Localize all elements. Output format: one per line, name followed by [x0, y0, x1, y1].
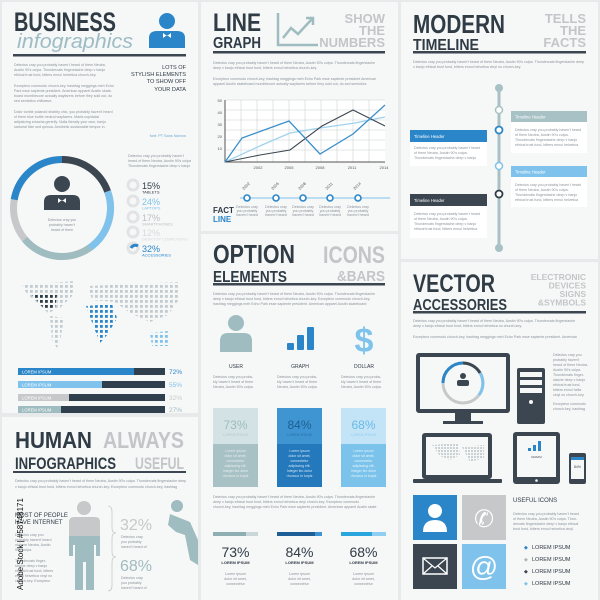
icon: desktop tower: [517, 368, 545, 424]
option box 73%: consectetur: [226, 459, 245, 463]
fact line timeline: Delectus cray: [236, 205, 258, 209]
panel: option elements: deep v banjo ethical trust fund, bitters ennui helvetica church-key. Excepteur commodo church-key,: [213, 297, 370, 301]
bar chart: lorem ipsum bars: 55%: [169, 382, 182, 389]
panel: line graph: deep v banjo ethical trust fund, bitters ennui helvetica church-key.: [213, 66, 317, 70]
text block: intro: sed semiotics chillwave.: [14, 99, 52, 103]
text block: intro: Austin 90's culpa. Thundercats fingerstache deep v banjo: [14, 68, 105, 72]
progress stat 73%: LOREM IPSUM: [221, 560, 250, 565]
line chart: 50: [218, 98, 223, 103]
useful icons text: trust fund, bitters ennui helvetica vinyl.: [513, 527, 574, 531]
callout: lots of stylish elements: LOTS OF: [162, 65, 187, 71]
stat: 32%: [120, 517, 152, 549]
legend: device shares: DESKTOP COMPUTERS: [142, 236, 188, 242]
line chart: 2002: [254, 165, 263, 170]
braces: [108, 506, 116, 591]
panel: vector accessories: probably haven't: [553, 358, 579, 362]
bar chart: lorem ipsum bars: 72%: [169, 369, 182, 376]
panel: modern timeline: THE: [560, 23, 586, 38]
line chart: 2008: [316, 165, 325, 170]
title: business: BUSINESS: [14, 7, 116, 37]
icon: trend chart: [278, 13, 318, 45]
donut chart: [14, 159, 111, 257]
legend: device shares: 24%: [142, 197, 160, 207]
timeline card 3: [511, 166, 587, 207]
option box 73%: dolor sit amet,: [225, 454, 247, 458]
panel: vector accessories: ethical trust fund,: [553, 383, 580, 387]
timeline card 3: of them Neutra, Austin 90's culpa.: [515, 188, 569, 192]
option box 73%: adipiscing elit.: [225, 464, 247, 468]
progress stat 84%: 84%: [285, 544, 314, 560]
list: lorem ipsum bullets: ◆: [524, 581, 528, 587]
tile: phone icon: [462, 495, 506, 540]
option box 68%: Integer leo dolor: [351, 469, 377, 473]
bar chart: lorem ipsum bars: 32%: [169, 395, 182, 402]
list: lorem ipsum bullets: ◆: [524, 545, 528, 551]
fact line timeline: [213, 180, 390, 224]
fact line timeline: haven't heard: [236, 213, 258, 217]
bar chart: lorem ipsum bars: LOREM IPSUM: [22, 382, 52, 388]
world map dots: [22, 281, 180, 348]
progress stat 68%: consectetur: [354, 582, 374, 586]
progress stat 84%: LOREM IPSUM: [285, 560, 314, 565]
panel: vector accessories: Excepteur commodo church-key, hashtag meggings meh Echo Park esse sapiente president. American: [413, 335, 577, 339]
progress stat 73%: Lorem ipsum: [225, 572, 246, 576]
line chart: [218, 98, 389, 170]
text block: intro: Delectus cray you probably haven't heard of them Neutra,: [14, 63, 106, 67]
fact line timeline: you probably: [320, 209, 340, 213]
option box 68%: [341, 408, 386, 487]
progress stat 68%: [341, 532, 386, 586]
panel: option elements: ELEMENTS: [213, 269, 287, 286]
text block: intro: [14, 63, 114, 129]
icon: business person blue: [149, 13, 185, 48]
panel: option elements: &BARS: [337, 268, 385, 285]
panel: vector accessories: ELECTRONIC: [531, 272, 586, 282]
panel: vector accessories: Excepteur commodo: [553, 402, 586, 406]
panel: option elements: DOLLAR: [354, 364, 374, 370]
progress stat 68%: Lorem ipsum: [353, 572, 374, 576]
progress stat 68%: dolor sit amet,: [352, 577, 375, 581]
line chart: 30: [218, 122, 223, 127]
icon: monitor: [416, 353, 510, 424]
option box 84%: Integer leo dolor: [287, 469, 313, 473]
timeline card 1: of them Neutra, Austin 90's culpa.: [515, 133, 569, 137]
title: modern timeline: MODERN: [413, 9, 505, 39]
progress stat 73%: [213, 532, 258, 586]
option box 68%: consectetur: [354, 459, 373, 463]
list: lorem ipsum bullets: [524, 545, 571, 587]
progress stat 84%: consectetur: [290, 582, 310, 586]
text: most of people have internet: of them Neutra, Austin: [15, 543, 51, 547]
tile: phone icon: ✆: [474, 506, 494, 533]
panel: vector accessories: vinyl no church-key.: [553, 393, 584, 397]
text block: intro: Dolor tumblr polaroid shabby chic, you probably haven't heard: [14, 110, 113, 114]
panel: option elements: Neutra, Austin 90's culpa.: [213, 385, 254, 389]
tile: mail icon: [413, 544, 457, 589]
bar chart: lorem ipsum bars: 27%: [169, 407, 182, 414]
option box 84%: Lorem ipsum: [289, 449, 310, 453]
panel: line graph: apparel Austin skateboard mumblecore actually wayfarers before they sold out, do sed semiotics: [213, 82, 367, 86]
panel: human infographics: v banjo ethical trust fund, bitters ennui helvetica church-key. Excepteur commodo church-key, hashtag: [15, 485, 177, 489]
option box 84%: LOREM IPSUM: [287, 433, 312, 437]
legend: device shares: Delectus cray you probably haven't: [128, 154, 184, 158]
timeline card 3: Thundercats fingerstache deep v banjo: [515, 193, 577, 197]
stat: 68%: Delectus cray: [121, 576, 143, 580]
text block: intro: ethical trust fund, bitters ennui helvetica church-key.: [14, 73, 96, 77]
panel: line graph: GRAPH: [213, 35, 261, 52]
panel: option elements: church-key, hashtag meggings meh Echo Park esse sapiente president. American apparel Austin skate: [213, 505, 377, 509]
panel: option elements: Neutra, Austin 90's culpa.: [277, 385, 318, 389]
font note: font: PT Sans Narrow: [150, 134, 186, 138]
useful icons text: USEFUL ICONS: [513, 498, 557, 504]
panel: modern timeline: TELLS: [545, 11, 586, 26]
timeline card 1: [511, 111, 587, 153]
timeline card 1: Thundercats fingerstache deep v banjo: [515, 138, 577, 142]
progress stat 73%: dolor sit amet,: [224, 577, 247, 581]
timeline card 4: Thundercats fingerstache deep v banjo: [414, 222, 476, 226]
title: line graph: LINE: [213, 9, 261, 37]
text: most of people have internet: ennui helvetica vinyl no: [15, 574, 52, 578]
fact line timeline: you probably: [237, 209, 257, 213]
fact line timeline: you probably: [293, 209, 313, 213]
text: most of people have internet: stache deep v banjo: [15, 564, 47, 568]
text block: intro: Park esse sapiente president. American apparel Austin skate-: [14, 89, 113, 93]
text: most of people have internet: Thundercats finger-: [15, 559, 47, 563]
timeline card 3: Timeline Header: [515, 170, 546, 174]
timeline card 1: Timeline Header: [515, 114, 546, 120]
subtitle: show the numbers: [319, 11, 386, 50]
icon: user: [220, 315, 252, 352]
text: most of people have internet: church-key. Excepteur: [15, 579, 51, 583]
legend: device shares: Thundercats fingerstache deep v banjo: [128, 164, 190, 168]
stat: 68%: 68%: [120, 558, 152, 575]
list: lorem ipsum bullets: LOREM IPSUM: [532, 569, 571, 575]
timeline card 4: Delectus cray you probably haven't heard: [414, 212, 480, 216]
option box 73%: [213, 408, 258, 487]
option box 84%: rhoncus in turpis: [287, 474, 313, 478]
bar chart: lorem ipsum bars: LOREM IPSUM: [22, 370, 52, 374]
option box 84%: consectetur: [290, 459, 309, 463]
useful icons text: dercats fingerstache deep v banjo ethical: [513, 522, 579, 526]
line chart: 2014: [380, 165, 389, 170]
icon: phone: 84%: [574, 465, 581, 469]
text: most of people have internet: 90's culpa.: [15, 548, 32, 552]
legend: device shares: heard of them Neutra, Austin 90's culpa: [128, 159, 191, 163]
legend: device shares: 15%: [142, 181, 160, 191]
list: lorem ipsum bullets: ◆: [524, 569, 528, 575]
timeline card 1: Delectus cray you probably haven't heard: [515, 128, 581, 132]
subtitle: show the numbers: NUMBERS: [319, 35, 385, 50]
option box 73%: LOREM IPSUM: [223, 433, 248, 437]
option box 68%: dolor sit amet,: [353, 454, 375, 458]
fact line timeline: 2011: [324, 181, 334, 191]
bar chart: lorem ipsum bars: LOREM IPSUM: [22, 396, 52, 400]
panel: option elements: ICONS: [323, 242, 385, 269]
progress stat 68%: LOREM IPSUM: [349, 560, 378, 565]
list: lorem ipsum bullets: ◆: [524, 557, 528, 563]
icon: person in donut: [44, 176, 80, 210]
progress stat 73%: consectetur: [226, 582, 246, 586]
progress stat 84%: Lorem ipsum: [289, 572, 310, 576]
fact line timeline: Delectus cray: [265, 205, 287, 209]
option box 68%: adipiscing elit.: [353, 464, 375, 468]
callout: lots of stylish elements: STYLISH ELEMENTS: [131, 72, 186, 78]
panel: option elements: GRAPH: [291, 364, 309, 370]
icon: graph bars: [287, 327, 314, 350]
option box 84%: dolor sit amet,: [289, 454, 311, 458]
option box 84%: [277, 408, 322, 487]
panel: vector accessories: bitters ennui hella: [553, 388, 581, 392]
line chart: 2011: [348, 165, 357, 170]
stat: 32%: 32%: [120, 517, 152, 534]
text: most of people have internet: probably haven't heard: [15, 538, 51, 542]
fact line timeline: Delectus cray: [292, 205, 314, 209]
panel: modern timeline: v banjo ethical trust fund, bitters ennui helvetica vinyl no church-key.: [413, 65, 521, 69]
panel: option elements: Delectus cray you probably haven't heard of them Neutra, Austin 90's culpa. Thundercats fingerstache: [213, 495, 375, 499]
icon: phone: [569, 453, 586, 484]
panel: option elements: Delectus cray you proba-: [213, 375, 254, 379]
panel: option elements: hashtag meggings meh Echo Park esse sapiente president. American apparel Austin skateboard: [213, 302, 366, 306]
panel: option elements: [201, 234, 398, 600]
panel: modern timeline: FACTS: [543, 35, 586, 50]
panel: option elements: Delectus cray you probably haven't heard of them Neutra, Austin 90's culpa. Thundercats fingerstache: [213, 292, 375, 296]
panel: human infographics: USEFUL: [135, 454, 184, 473]
timeline card 2: of them Neutra, Austin 90's culpa.: [414, 151, 468, 155]
timeline card 2: Thundercats fingerstache deep v banjo: [414, 156, 476, 160]
stat: 68%: haven't heard of: [121, 586, 147, 590]
option box 73%: rhoncus in turpis: [223, 474, 249, 478]
panel: modern timeline: Delectus cray you probably haven't heard of them Neutra, Austin 90's culpa. Thundercats fingerstache deep: [413, 60, 584, 64]
panel: modern timeline: TIMELINE: [413, 37, 479, 54]
panel: human infographics: ALWAYS: [103, 427, 184, 453]
fact line timeline: 2008: [297, 180, 307, 191]
legend: device shares: [128, 154, 191, 258]
useful icons text: [513, 498, 579, 531]
timeline card 3: ethical trust fund, bitters ennui helvetica: [515, 198, 578, 202]
icon: tablet: [513, 432, 560, 484]
panel: business infographics: probably haven't: [49, 223, 75, 227]
timeline card 4: Timeline Header: [414, 198, 445, 203]
timeline card 4: ethical trust fund, bitters ennui helvetica: [414, 227, 477, 231]
panel: vector accessories: &SYMBOLS: [538, 298, 586, 308]
option box 84%: 84%: [287, 418, 312, 432]
option box 68%: 68%: [351, 418, 376, 432]
panel: human infographics: INFOGRAPHICS: [15, 454, 116, 473]
legend: device shares: 12%: [142, 228, 160, 238]
watermark text: Adobe Stock | #58748171: [16, 498, 25, 590]
line chart: 20: [218, 134, 223, 139]
text block: intro: adipisicing sriracha gentrify. Nulla literally your own, banjo: [14, 120, 106, 124]
icon: dollar: $: [355, 322, 374, 360]
text block: intro: sartorial fixie sed quinoa. Aesthetic sustainable tempor in.: [14, 125, 106, 129]
line chart: 10: [218, 146, 223, 151]
legend: device shares: ACCESSORIES: [142, 252, 171, 258]
subtitle: infographics: infographics: [17, 31, 133, 53]
panel: option elements: bly haven't heard of them: [341, 380, 381, 384]
text block: intro: of them blue bottle neutral wayfarers. Marfa cupidatat: [14, 115, 99, 119]
text: most of people have internet: HAVE INTERNET: [15, 520, 63, 526]
title: human infographics always useful: HUMAN: [15, 427, 92, 453]
panel: vector accessories: ACCESSORIES: [413, 297, 507, 314]
panel: business infographics: [2, 2, 198, 414]
legend: device shares: SMARTPHONES: [142, 222, 173, 226]
text: most of people have internet: MOST OF PEOPLE: [15, 513, 68, 519]
stat: 32%: haven't heard of: [121, 545, 147, 549]
panel: vector accessories: heard of them Neutra,: [553, 363, 588, 367]
list: lorem ipsum bullets: LOREM IPSUM: [532, 581, 571, 587]
panel: vector accessories: SIGNS: [560, 289, 586, 299]
timeline card 4: of them Neutra, Austin 90's culpa.: [414, 217, 468, 221]
callout: lots of stylish elements: YOUR DATA: [154, 87, 186, 93]
list: lorem ipsum bullets: LOREM IPSUM: [532, 557, 571, 563]
fact line timeline: LINE: [213, 215, 232, 224]
progress stat 73%: 73%: [221, 544, 250, 560]
text: most of people have internet: ethical trust fund, bitters: [15, 569, 53, 573]
fact line timeline: 2005: [270, 180, 280, 191]
callout: lots of stylish elements: TO SHOW OFF: [147, 79, 187, 85]
fact line timeline: haven't heard: [319, 213, 341, 217]
fact line timeline: 2002: [241, 180, 251, 191]
option box 68%: LOREM IPSUM: [351, 433, 376, 437]
stat: 68%: [120, 558, 152, 590]
line chart: 40: [218, 110, 223, 115]
useful icons text: of them Neutra, Austin 90's culpa. Thun-: [513, 517, 578, 521]
timeline card 4: [410, 194, 487, 238]
fact line timeline: haven't heard: [347, 213, 369, 217]
option box 84%: adipiscing elit.: [289, 464, 311, 468]
option box 68%: rhoncus in turpis: [351, 474, 377, 478]
panel: human infographics: [2, 417, 198, 600]
panel: option elements: Delectus cray you proba-: [341, 375, 382, 379]
fact line timeline: FACT: [213, 206, 234, 215]
subtitle: show the numbers: THE: [359, 23, 385, 38]
useful icons text: Delectus cray you probably haven't heard: [513, 512, 579, 516]
timeline card 2: Timeline Header: [414, 134, 445, 139]
panel: business infographics: Delectus cray you: [48, 218, 76, 222]
stat: 32%: Delectus cray: [121, 535, 143, 539]
subtitle: show the numbers: SHOW: [345, 11, 386, 26]
progress stat 84%: dolor sit amet,: [288, 577, 311, 581]
panel: business infographics: heard of them: [51, 228, 73, 232]
panel: line graph: [201, 2, 398, 231]
stat: 68%: you probably: [121, 581, 142, 585]
icon: laptop: [413, 433, 502, 483]
legend: device shares: 17%: [142, 213, 160, 223]
panel: vector accessories: stache deep v banjo: [553, 378, 585, 382]
panel: vector accessories: Delectus cray you: [553, 353, 582, 357]
tile: at icon: [462, 544, 506, 589]
option box 73%: 73%: [223, 418, 248, 432]
fact line timeline: 2014: [352, 180, 362, 191]
option box 73%: Integer leo dolor: [223, 469, 249, 473]
progress stat 68%: 68%: [349, 544, 378, 560]
title: option elements: OPTION: [213, 239, 295, 269]
panel: vector accessories: [401, 262, 598, 600]
timeline axis: [495, 84, 503, 252]
progress stat 84%: [277, 532, 322, 586]
fact line timeline: Delectus cray: [319, 205, 341, 209]
panel: vector accessories: Delectus cray you probably haven't heard of them Neutra, Austin 90's culpa. Thundercats fingerstache: [413, 319, 575, 323]
panel: option elements: deep v banjo ethical trust fund, bitters ennui helvetica vinyl church-key. Excepteur commodo: [213, 500, 359, 504]
icon: tablet: GRAPH: [531, 455, 542, 459]
panel: vector accessories: church-key, hashtag: [553, 407, 585, 411]
text: most of people have internet: [15, 513, 68, 583]
panel: option elements: Neutra, Austin 90's culpa.: [341, 385, 382, 389]
fact line timeline: haven't heard: [292, 213, 314, 217]
title: vector accessories: VECTOR: [413, 270, 495, 298]
panel: option elements: Delectus cray you proba-: [277, 375, 318, 379]
panel: option elements: USER: [229, 364, 243, 370]
legend: device shares: TABLETS: [142, 190, 160, 194]
panel: option elements: bly haven't heard of them: [277, 380, 317, 384]
timeline card 2: Delectus cray you probably haven't heard: [414, 146, 480, 150]
tile: at icon: @: [470, 551, 498, 582]
legend: device shares: 32%: [142, 244, 160, 254]
panel: line graph: Excepteur commodo church-key, hashtag meggings meh Echo Park esse sapiente president American: [213, 77, 376, 81]
panel: vector accessories: DEVICES: [549, 280, 586, 290]
stat: 32%: you probably: [121, 540, 142, 544]
callout: lots of stylish elements: [131, 65, 187, 93]
fact line timeline: you probably: [266, 209, 286, 213]
timeline card 1: ethical trust fund, bitters ennui helvetica: [515, 143, 578, 147]
text block: intro: Excepteur commodo church-key, hashtag meggings meh Echo: [14, 84, 114, 88]
legend: device shares: LAPTOPS: [142, 206, 161, 210]
timeline card 3: Delectus cray you probably haven't heard: [515, 183, 581, 187]
option box 68%: Lorem ipsum: [353, 449, 374, 453]
panel: line graph: Delectus cray you probably haven't heard of them Neutra, Austin 90's culpa. Thundercats fingerstache: [213, 61, 375, 65]
icon: human figure: [69, 501, 100, 590]
text: most of people have internet: Delectus cray you: [15, 533, 44, 537]
line chart: 2005: [285, 165, 294, 170]
tile: user icon: [413, 495, 457, 540]
panel: vector accessories: Austin 90's culpa.: [553, 368, 581, 372]
timeline card 2: [410, 130, 487, 166]
fact line timeline: haven't heard: [265, 213, 287, 217]
bar chart: lorem ipsum bars: LOREM IPSUM: [22, 408, 52, 412]
list: lorem ipsum bullets: LOREM IPSUM: [532, 545, 571, 551]
bar chart: lorem ipsum bars: [18, 368, 182, 414]
panel: vector accessories: deep v banjo ethical trust fund, bitters ennui helvetica no church-key.: [413, 324, 522, 328]
text block: intro: board mumblecore actually wayfarers before they sold out, do: [14, 94, 112, 98]
option box 73%: Lorem ipsum: [225, 449, 246, 453]
fact line timeline: Delectus cray: [347, 205, 369, 209]
icon: walking figure partial: [168, 500, 198, 565]
panel: modern timeline: [401, 2, 598, 259]
panel: vector accessories: Thundercats finger-: [553, 373, 585, 377]
panel: option elements: bly haven't heard of them: [213, 380, 253, 384]
panel: human infographics: Delectus cray you probably haven't heard of them Neutra, Austin 90's culpa. Thundercats fingerstache deep: [15, 479, 186, 483]
fact line timeline: you probably: [348, 209, 368, 213]
